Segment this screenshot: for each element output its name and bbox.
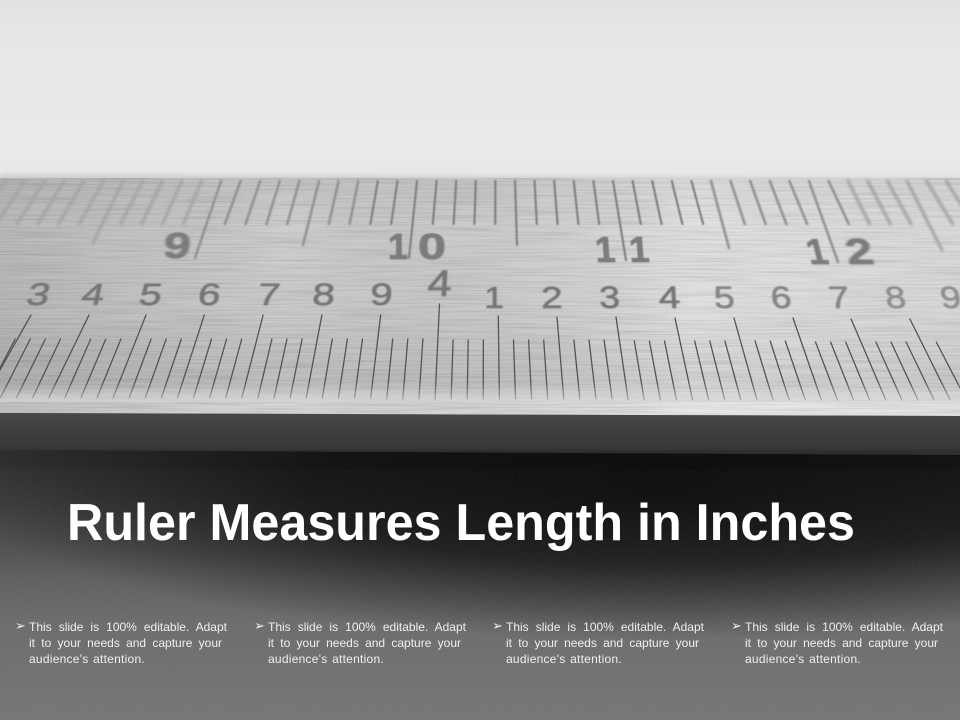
bullet text 3 [492, 619, 704, 666]
bullet text 3: it to your needs and capture your [506, 636, 699, 650]
upper ruler numbers 9 to 12 [162, 226, 877, 272]
lower ruler numbers: 9 [369, 277, 394, 312]
lower ruler numbers: 5 [713, 281, 736, 315]
bullet text 2 [254, 619, 466, 666]
bullet text 2: ➢ [254, 619, 265, 634]
upper ruler numbers 9 to 12: 9 [162, 226, 193, 266]
lower ruler numbers: 7 [827, 281, 851, 315]
bullet text 4: This slide is 100% editable. Adapt [745, 620, 943, 634]
lower ruler numbers: 7 [256, 277, 282, 312]
bullet text 1 [15, 619, 227, 666]
upper ruler numbers 9 to 12: 1 [628, 229, 651, 270]
bullet text 2: it to your needs and capture your [268, 636, 461, 650]
lower ruler numbers: 5 [137, 277, 165, 312]
bullet text 3: ➢ [492, 619, 503, 634]
bullet text 4: audience's attention. [745, 652, 861, 666]
lower ruler numbers: 4 [427, 263, 453, 304]
lower ruler numbers: 8 [311, 277, 336, 312]
upper ruler numbers 9 to 12: 1 [594, 229, 617, 270]
bullet text 3: This slide is 100% editable. Adapt [506, 620, 704, 634]
upper ruler numbers 9 to 12: 0 [418, 227, 446, 267]
bullet text 2: This slide is 100% editable. Adapt [268, 620, 466, 634]
upper ruler scale: centimetre ticks [0, 181, 960, 262]
lower ruler scale: fine ticks [0, 304, 960, 400]
lower ruler numbers: 3 [23, 277, 54, 312]
upper ruler numbers 9 to 12: 1 [802, 232, 832, 272]
lower ruler numbers [23, 263, 960, 315]
bullet text 2: audience's attention. [268, 652, 384, 666]
lower ruler numbers: 4 [78, 277, 108, 312]
lower ruler numbers: 3 [599, 281, 621, 315]
lower ruler numbers: 8 [883, 281, 908, 315]
upper ruler numbers 9 to 12: 1 [388, 226, 408, 267]
bullet text 4 [731, 619, 943, 666]
bullet text 4: it to your needs and capture your [745, 636, 938, 650]
lower ruler numbers: 1 [484, 281, 504, 315]
lower ruler numbers: 6 [769, 281, 793, 315]
bullet text 1: This slide is 100% editable. Adapt [29, 620, 227, 634]
bullet text 1: it to your needs and capture your [29, 636, 222, 650]
bullet text 1: ➢ [15, 619, 26, 634]
title: Ruler Measures Length in Inches [67, 494, 855, 552]
bullet text 1: audience's attention. [29, 652, 145, 666]
lower ruler numbers: 2 [541, 281, 563, 315]
bullet text 4: ➢ [731, 619, 742, 634]
lower ruler numbers: 6 [196, 277, 223, 312]
lower ruler numbers: 4 [658, 281, 681, 315]
bullet text 3: audience's attention. [506, 652, 622, 666]
upper ruler numbers 9 to 12: 2 [842, 232, 877, 272]
